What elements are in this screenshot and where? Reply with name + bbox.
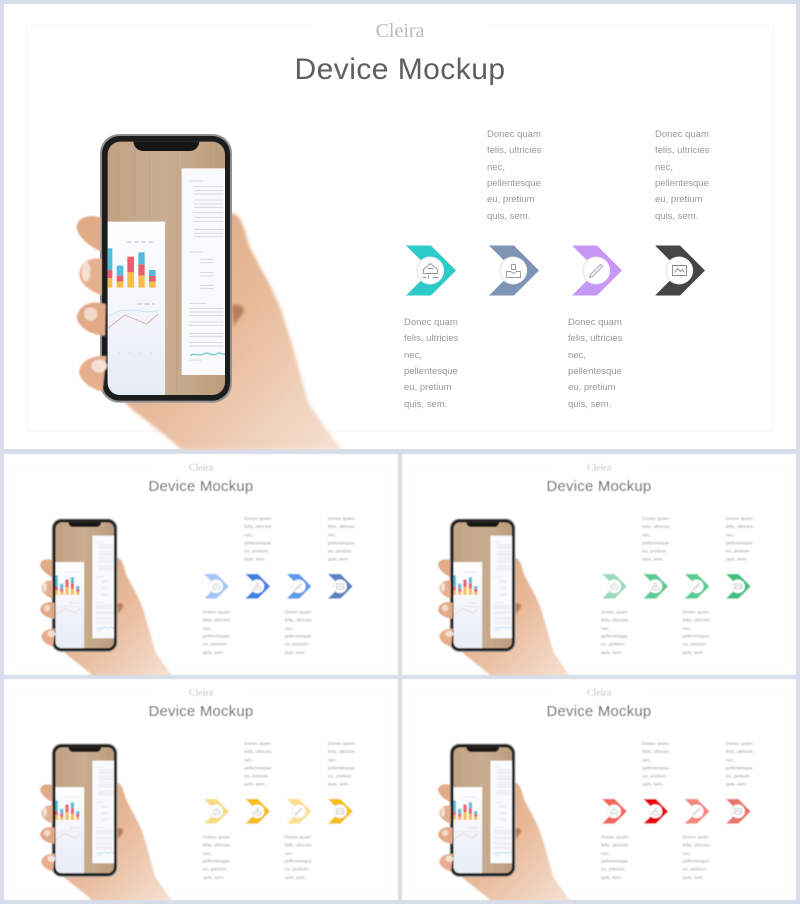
panel: green slide: pellentesque: [683, 634, 710, 640]
panel: red slide: [402, 679, 796, 900]
panel: red slide: felis, ultricies: [642, 749, 670, 755]
panel: yellow slide: felis, ultricies: [244, 749, 272, 755]
panel: blue slide: felis, ultricies: [244, 524, 272, 530]
panel: yellow slide: eu, pretium: [328, 773, 352, 779]
panel: green slide: nec,: [601, 627, 610, 632]
text block bottom 3: eu, pretium: [568, 382, 616, 393]
panel: green slide: Device Mockup: [547, 479, 651, 495]
brand name: Cleira: [376, 20, 425, 42]
panel: blue slide: quis, sem.: [285, 650, 306, 656]
panel: blue slide: nec,: [285, 627, 294, 632]
panel: red slide: pellentesque: [683, 859, 710, 865]
panel: red slide: nec,: [601, 852, 610, 857]
text block top 4: pellentesque: [655, 178, 709, 189]
text block top 4: nec,: [655, 162, 673, 173]
panel: yellow slide: [4, 679, 398, 900]
panel: red slide: quis, sem.: [642, 782, 664, 788]
panel: green slide: Donec quam: [726, 516, 753, 522]
panel: green slide: nec,: [726, 533, 735, 538]
panel: green slide: felis, ultricies: [642, 524, 670, 530]
text block top 2: nec,: [487, 162, 505, 173]
panel: yellow slide: felis, ultricies: [328, 749, 356, 755]
panel: red slide: pellentesque: [601, 859, 628, 865]
panel: green slide: nec,: [683, 627, 692, 632]
panel: blue slide: pellentesque: [203, 634, 230, 640]
panel: yellow slide: quis, sem.: [328, 782, 349, 788]
text block bottom 1: pellentesque: [404, 366, 458, 377]
panel: blue slide: Donec quam: [244, 516, 271, 522]
panel: yellow slide: Donec quam: [328, 741, 355, 747]
panel: blue slide: pellentesque: [244, 540, 271, 546]
panel: yellow slide: nec,: [328, 758, 337, 763]
panel: green slide: eu, pretium: [601, 642, 625, 648]
panel: blue slide: felis, ultricies: [203, 617, 231, 623]
text block bottom 1: eu, pretium: [404, 382, 452, 393]
panel: red slide: nec,: [726, 758, 735, 763]
panel: blue slide: Device Mockup: [149, 479, 253, 495]
panel: blue slide: Donec quam: [328, 516, 355, 522]
text block top 2: pellentesque: [487, 178, 541, 189]
panel: red slide: Donec quam: [601, 834, 628, 840]
panel: blue slide: Donec quam: [285, 609, 311, 615]
panel: blue slide: eu, pretium: [203, 642, 227, 648]
panel: red slide: eu, pretium: [683, 867, 706, 873]
panel: green slide: Donec quam: [642, 516, 669, 522]
panel: blue slide: quis, sem.: [328, 557, 349, 563]
panel: blue slide: eu, pretium: [285, 642, 308, 648]
panel: red slide: felis, ultricies: [601, 842, 629, 848]
panel: yellow slide: nec,: [244, 758, 253, 763]
text block bottom 1: quis, sem.: [404, 399, 447, 410]
panel: blue slide: pellentesque: [328, 540, 355, 546]
panel: blue slide: [4, 454, 398, 675]
panel: yellow slide: felis, ultricies: [203, 842, 231, 848]
panel: red slide: felis, ultricies: [726, 749, 754, 755]
panel: yellow slide: pellentesque: [328, 765, 355, 771]
panel: green slide: pellentesque: [642, 540, 669, 546]
panel: yellow slide: quis, sem.: [203, 875, 225, 881]
panel: yellow slide: Donec quam: [285, 834, 311, 840]
panel: green slide: felis, ultricies: [683, 617, 710, 623]
panel: yellow slide: nec,: [203, 852, 212, 857]
panel: blue slide: felis, ultricies: [285, 617, 312, 623]
panel: yellow slide: Device Mockup: [149, 704, 253, 720]
panel: yellow slide: pellentesque: [203, 859, 230, 865]
panel: yellow slide: quis, sem.: [244, 782, 266, 788]
panel: red slide: quis, sem.: [726, 782, 747, 788]
panel: red slide: felis, ultricies: [683, 842, 710, 848]
text block bottom 3: pellentesque: [568, 366, 622, 377]
panel: green slide: [402, 454, 796, 675]
chevron 4: [655, 246, 705, 296]
panel: blue slide: eu, pretium: [244, 548, 268, 554]
panel: yellow slide: Cleira: [189, 687, 214, 698]
panel: red slide: pellentesque: [642, 765, 669, 771]
panel: red slide: Cleira: [587, 687, 612, 698]
panel: yellow slide: eu, pretium: [244, 773, 268, 779]
panel: yellow slide: Donec quam: [203, 834, 230, 840]
panel: red slide: eu, pretium: [726, 773, 750, 779]
panel: blue slide: eu, pretium: [328, 548, 352, 554]
panel: yellow slide: pellentesque: [285, 859, 312, 865]
panel: green slide: pellentesque: [726, 540, 753, 546]
panel: red slide: Device Mockup: [547, 704, 651, 720]
text block bottom 3: nec,: [568, 350, 586, 361]
hand holding phone: [77, 134, 342, 450]
panel: main teal slide: [4, 4, 796, 450]
panel: blue slide: nec,: [203, 627, 212, 632]
text block bottom 3: quis, sem.: [568, 399, 611, 410]
panel: red slide: pellentesque: [726, 765, 753, 771]
panel: green slide: quis, sem.: [726, 557, 747, 563]
panel: blue slide: felis, ultricies: [328, 524, 356, 530]
panel: red slide: Donec quam: [726, 741, 753, 747]
panel: green slide: quis, sem.: [642, 557, 664, 563]
text block top 2: felis, ultricies: [487, 145, 542, 156]
panel: blue slide: nec,: [328, 533, 337, 538]
panel: red slide: Donec quam: [683, 834, 709, 840]
panel: yellow slide: felis, ultricies: [285, 842, 312, 848]
panel: yellow slide: Donec quam: [244, 741, 271, 747]
panel: green slide: eu, pretium: [642, 548, 666, 554]
panel: red slide: nec,: [683, 852, 692, 857]
panel: yellow slide: nec,: [285, 852, 294, 857]
panel: red slide: eu, pretium: [601, 867, 625, 873]
text block top 4: quis, sem.: [655, 211, 698, 222]
panel: blue slide: Donec quam: [203, 609, 230, 615]
panel: yellow slide: quis, sem.: [285, 875, 306, 881]
panel: green slide: Cleira: [587, 462, 612, 473]
text block top 2: Donec quam: [487, 129, 541, 140]
text block bottom 1: Donec quam: [404, 317, 458, 328]
panel: red slide: quis, sem.: [683, 875, 704, 881]
text block bottom 1: felis, ultricies: [404, 333, 459, 344]
panel: green slide: felis, ultricies: [601, 617, 629, 623]
panel: red slide: eu, pretium: [642, 773, 666, 779]
panel: blue slide: Cleira: [189, 462, 214, 473]
panel: green slide: Donec quam: [683, 609, 709, 615]
panel: blue slide: quis, sem.: [203, 650, 225, 656]
title: Device Mockup: [295, 53, 505, 86]
panel: green slide: Donec quam: [601, 609, 628, 615]
panel: blue slide: pellentesque: [285, 634, 312, 640]
panel: red slide: quis, sem.: [601, 875, 623, 881]
text block bottom 3: felis, ultricies: [568, 333, 623, 344]
text block top 4: eu, pretium: [655, 194, 703, 205]
text block top 4: Donec quam: [655, 129, 709, 140]
panel: yellow slide: eu, pretium: [203, 867, 227, 873]
text block top 4: felis, ultricies: [655, 145, 710, 156]
panel: blue slide: nec,: [244, 533, 253, 538]
text block bottom 3: Donec quam: [568, 317, 622, 328]
panel: yellow slide: eu, pretium: [285, 867, 308, 873]
panel: red slide: Donec quam: [642, 741, 669, 747]
text block top 2: eu, pretium: [487, 194, 535, 205]
panel: green slide: eu, pretium: [683, 642, 706, 648]
panel: green slide: quis, sem.: [683, 650, 704, 656]
panel: red slide: nec,: [642, 758, 651, 763]
text block top 2: quis, sem.: [487, 211, 530, 222]
text block bottom 1: nec,: [404, 350, 422, 361]
panel: green slide: eu, pretium: [726, 548, 750, 554]
chevron 2: [489, 246, 539, 296]
panel: yellow slide: pellentesque: [244, 765, 271, 771]
panel: green slide: quis, sem.: [601, 650, 623, 656]
panel: green slide: nec,: [642, 533, 651, 538]
panel: green slide: felis, ultricies: [726, 524, 754, 530]
chevron 1: [406, 246, 456, 296]
panel: green slide: pellentesque: [601, 634, 628, 640]
panel: blue slide: quis, sem.: [244, 557, 266, 563]
chevron 3: [572, 246, 622, 296]
